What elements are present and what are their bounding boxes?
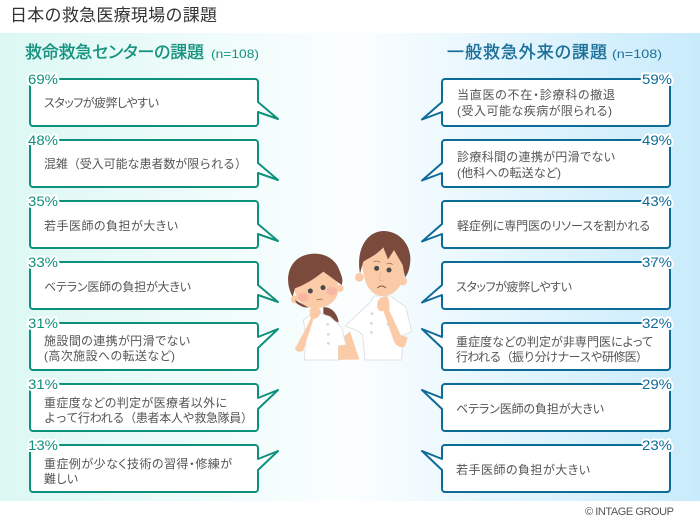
callout: 29% bbox=[422, 376, 672, 431]
callout: 35%: 35% bbox=[28, 193, 58, 209]
callout: 59% bbox=[422, 71, 672, 126]
callout: 32% bbox=[422, 315, 672, 370]
callout: 49%: 診療科間の連携が円滑でない bbox=[457, 149, 615, 164]
callout: 48% bbox=[28, 132, 278, 187]
callout: 31% triage bbox=[28, 376, 278, 431]
callout: 69% bbox=[28, 71, 278, 126]
callout: 31% transfers bbox=[28, 315, 278, 370]
callout: 35%: 若手医師の負担が大きい bbox=[44, 218, 178, 233]
callout: 31% transfers: (高次施設への転送など) bbox=[44, 348, 175, 363]
heading: emergency center: 救命救急センターの課題 bbox=[25, 43, 204, 62]
callout: 69%: 69% bbox=[28, 71, 58, 87]
callout: 32%: 行われる（振り分けナースや研修医） bbox=[456, 349, 648, 364]
callout: 43%: 軽症例に専門医のリソースを割かれる bbox=[457, 219, 650, 233]
icon: female nurse bbox=[288, 254, 359, 360]
panel: emergency center issues bbox=[25, 43, 278, 492]
callout: 49%: (他科への転送など) bbox=[457, 165, 561, 180]
callout: 23% bbox=[422, 437, 672, 492]
callout: 69%: スタッフが疲弊しやすい bbox=[44, 95, 159, 110]
callout: 29%: 29% bbox=[642, 376, 672, 392]
panel: general emergency outpatient issues bbox=[422, 43, 672, 492]
callout: 33%: 33% bbox=[28, 254, 58, 270]
icon: male doctor bbox=[338, 231, 412, 360]
callout: 49% bbox=[422, 132, 672, 187]
callout: 37% bbox=[422, 254, 672, 309]
callout: 32%: 重症度などの判定が非専門医によって bbox=[456, 334, 653, 349]
callout: 31% triage: 重症度などの判定が医療者以外に bbox=[44, 395, 227, 410]
callout: 31% triage: 31% bbox=[28, 376, 58, 392]
callout: 13%: 難しい bbox=[44, 471, 78, 486]
callout: 59%: 59% bbox=[642, 71, 672, 87]
callout: 48%: 48% bbox=[28, 132, 58, 148]
callout: 35% bbox=[28, 193, 278, 248]
callout: 31% transfers: 施設間の連携が円滑でない bbox=[44, 333, 190, 348]
callout: 23%: 若手医師の負担が大きい bbox=[456, 462, 590, 477]
callout: 29%: ベテラン医師の負担が大きい bbox=[456, 401, 604, 416]
callout: 31% triage: よって行われる（患者本人や救急隊員） bbox=[44, 410, 253, 425]
callout: 33% bbox=[28, 254, 278, 309]
callout: 33%: ベテラン医師の負担が大きい bbox=[44, 279, 191, 294]
callout: 13%: 13% bbox=[28, 437, 58, 453]
callout: 31% transfers: 31% bbox=[28, 315, 58, 331]
title: 日本の救急医療現場の課題 bbox=[10, 6, 217, 25]
callout: 43%: 43% bbox=[642, 193, 672, 209]
callout: 32%: 32% bbox=[642, 315, 672, 331]
callout: 13% bbox=[28, 437, 278, 492]
illustration: two thinking medical staff bbox=[288, 231, 412, 360]
callout: 49%: 49% bbox=[642, 132, 672, 148]
callout: 43% bbox=[422, 193, 672, 248]
callout: 23%: 23% bbox=[642, 437, 672, 453]
callout: 48%: 混雑（受入可能な患者数が限られる） bbox=[44, 156, 247, 171]
callout: 37%: スタッフが疲弊しやすい bbox=[456, 279, 572, 294]
heading: emergency center: (n=108) bbox=[211, 47, 259, 61]
heading: general outpatient: 一般救急外来の課題 bbox=[447, 43, 607, 62]
callout: 37%: 37% bbox=[642, 254, 672, 270]
callout: 59%: (受入可能な疾病が限られる) bbox=[457, 103, 612, 118]
heading: general outpatient: (n=108) bbox=[612, 47, 662, 61]
callout: 59%: 当直医の不在・診療科の撤退 bbox=[457, 87, 615, 102]
callout: 13%: 重症例が少なく技術の習得・修練が bbox=[44, 456, 232, 471]
copyright: © INTAGE GROUP bbox=[585, 506, 674, 518]
